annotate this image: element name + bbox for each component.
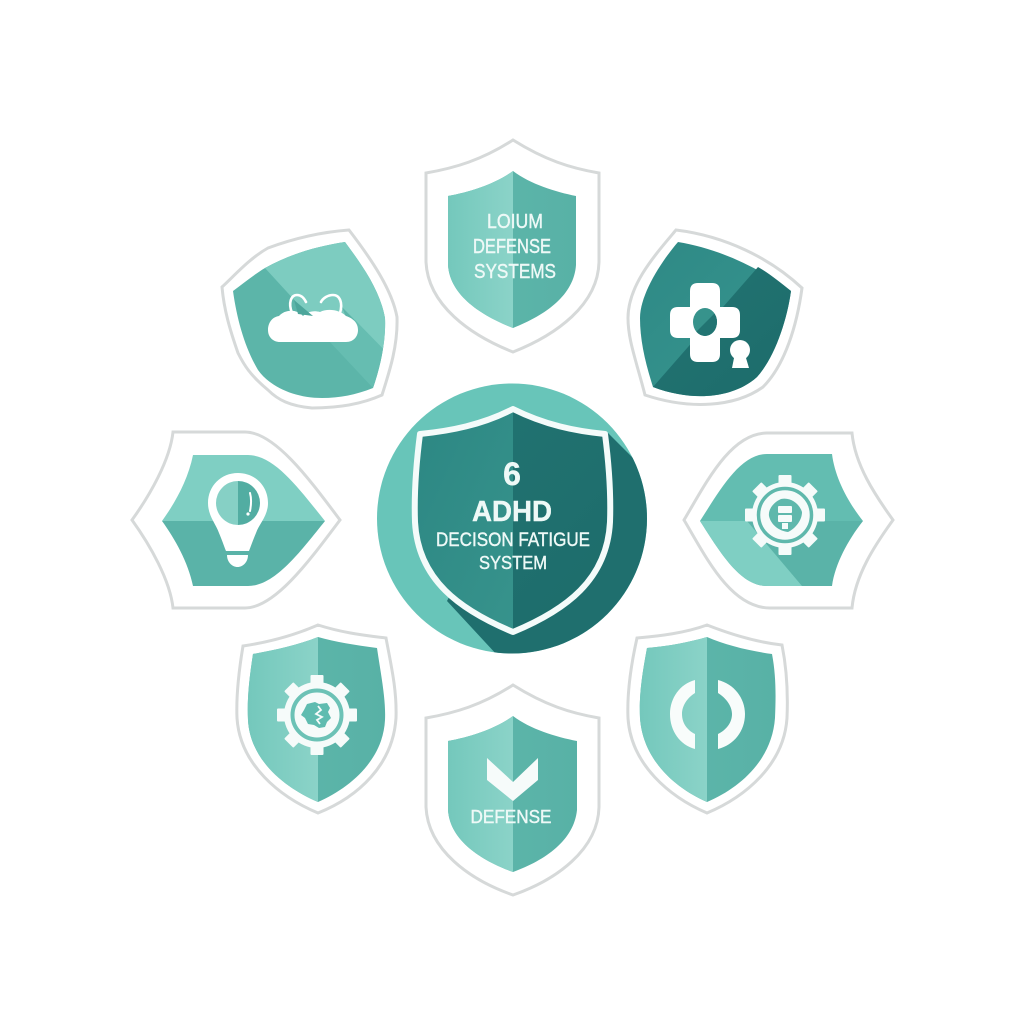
title: 6 ADHD Decision Fatigue System: SYSTEM [479,553,547,573]
label: Defense: DEFENSE [470,807,552,827]
icon: medical cross with person [670,283,750,368]
title: 6 ADHD Decision Fatigue System: ADHD [472,496,552,528]
icon: gear with chip [745,475,825,555]
label: Loium Defense Systems: LOIUM [487,211,543,233]
panel: lower right shield with bracket icon [628,625,787,813]
panel: right shield with gear [684,433,893,608]
panel: upper left shield with cloud icon [222,230,397,408]
panel: lower left shield with gear [237,625,396,813]
panel: top shield Loium Defense Systems [426,140,599,352]
label: Loium Defense Systems: DEFENSE [473,236,551,258]
label: Loium Defense Systems [473,211,556,283]
title: 6 ADHD Decision Fatigue System [436,456,590,573]
infographic: shield system [130,138,895,896]
title: 6 ADHD Decision Fatigue System: DECISON FATIGUE [436,530,590,551]
icon: chevron [487,758,538,801]
label: Loium Defense Systems: SYSTEMS [474,261,556,283]
icon: cloud with hooks [268,295,358,342]
title: 6 ADHD Decision Fatigue System: 6 [503,456,521,492]
panel: upper right shield with cross icon [628,230,802,404]
icon: open circle brackets [670,680,745,749]
panel: bottom shield Defense [426,685,599,895]
panel: central circle and shield [377,384,647,654]
icon: light bulb [208,473,268,567]
icon: gear with broken core [277,675,357,755]
panel: left shield with light bulb [132,432,340,608]
